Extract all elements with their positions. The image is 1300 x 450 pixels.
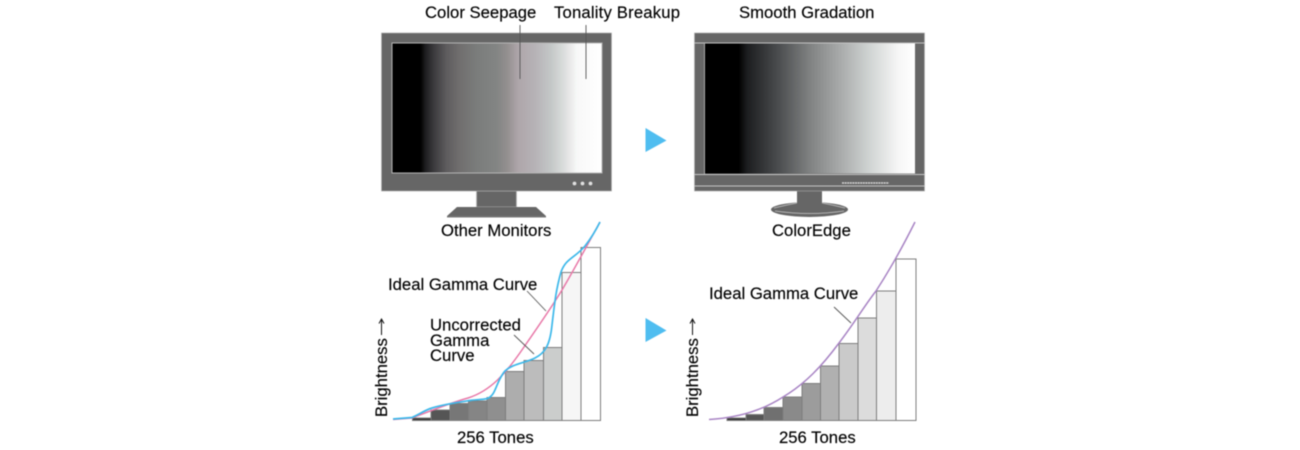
curve: ideal gamma [393,222,600,420]
chart: ColorEdge gamma [683,222,916,447]
leader line: ideal curve [527,291,546,311]
arrow: top [646,128,666,152]
monitor bezel [694,33,924,191]
chart: other monitors gamma [372,222,600,447]
heading: Smooth Gradation: Smooth Gradation [739,3,874,22]
leader line: ideal curve [834,307,851,323]
axis label: 256 tones: 256 Tones [457,428,534,447]
leader line: color seepage [519,25,521,79]
monitor: ColorEdge [694,33,925,217]
heading: Tonality Breakup: Tonality Breakup [554,3,680,22]
monitor bezel [382,33,612,191]
screen gradient [392,43,602,173]
arrow: bottom [646,318,666,342]
screen gradient [705,44,915,174]
axis label: 256 tones: 256 Tones [779,428,856,447]
axis label: brightness: Brightness [683,338,702,417]
bezel highlights [694,43,925,186]
heading: Color Seepage: Color Seepage [425,3,536,22]
monitor stand [447,191,546,218]
tone bars [727,259,916,420]
label: uncorrected gamma curve: Gamma [430,331,490,350]
label: ideal gamma curve: Ideal Gamma Curve [709,284,858,303]
curve: uncorrected gamma [393,222,600,419]
monitor: other monitors [382,33,612,218]
control buttons [573,182,592,185]
label: ColorEdge: ColorEdge [772,221,851,240]
axis label: brightness: Brightness [372,338,391,417]
curve: ideal gamma [709,222,915,420]
label: Other Monitors: Other Monitors [441,221,551,240]
leader line: uncorrected curve [514,335,534,354]
label: ideal gamma curve: Ideal Gamma Curve [388,275,537,294]
monitor stand [771,191,848,217]
label: uncorrected gamma curve: Uncorrected [430,316,521,334]
leader line: tonality breakup [585,25,587,79]
label: uncorrected gamma curve: Curve [430,346,475,365]
axis arrow: brightness [379,319,384,335]
tone bars [412,248,600,420]
axis arrow: brightness [690,319,695,335]
